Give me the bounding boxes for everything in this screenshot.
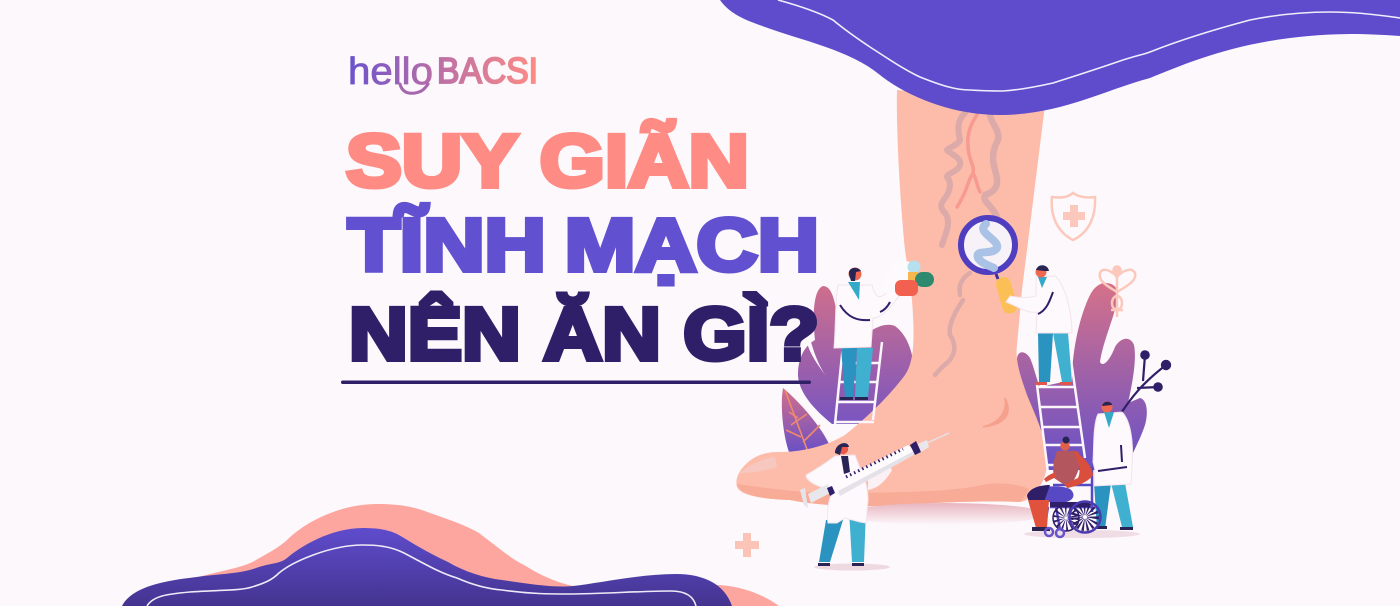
doctor with syringe [800, 433, 949, 570]
left leaf with veins [782, 388, 829, 452]
logo: helloBACSI: hello [348, 51, 433, 93]
foot ground shadow [845, 503, 1045, 525]
foot underside shading [737, 483, 1029, 506]
title underline [341, 380, 811, 384]
varicose veins [935, 113, 998, 375]
right ladder [1036, 360, 1085, 473]
ankle crease [983, 398, 1008, 427]
woman in wheelchair [1024, 436, 1140, 538]
top wave blob [720, 0, 1400, 115]
pills and container [880, 259, 910, 296]
magnifying glass [961, 218, 1019, 315]
icon: shield with cross [1052, 193, 1095, 240]
doctor with magnifier [1006, 265, 1072, 385]
left plant [798, 286, 914, 424]
title line 2: TĨNH MẠCH [348, 204, 819, 286]
bottom wave blob [122, 504, 779, 606]
logo: helloBACSI: BACSI [437, 50, 538, 91]
left ladder [835, 342, 882, 424]
title line 3: NÊN ĂN GÌ? [349, 292, 819, 376]
syringe [800, 433, 949, 508]
logo: helloBACSI [348, 50, 538, 93]
doctor with pills [834, 259, 934, 400]
foot and leg [736, 90, 1047, 506]
toenail [740, 457, 777, 473]
right plant [1017, 283, 1147, 470]
title line 1: SUY GIÃN [346, 120, 749, 202]
icon: caduceus [1100, 266, 1135, 317]
doctor pushing wheelchair [1093, 402, 1133, 530]
icon: plus [735, 533, 759, 557]
branch with berries [1121, 350, 1171, 413]
wheels [1045, 502, 1100, 537]
